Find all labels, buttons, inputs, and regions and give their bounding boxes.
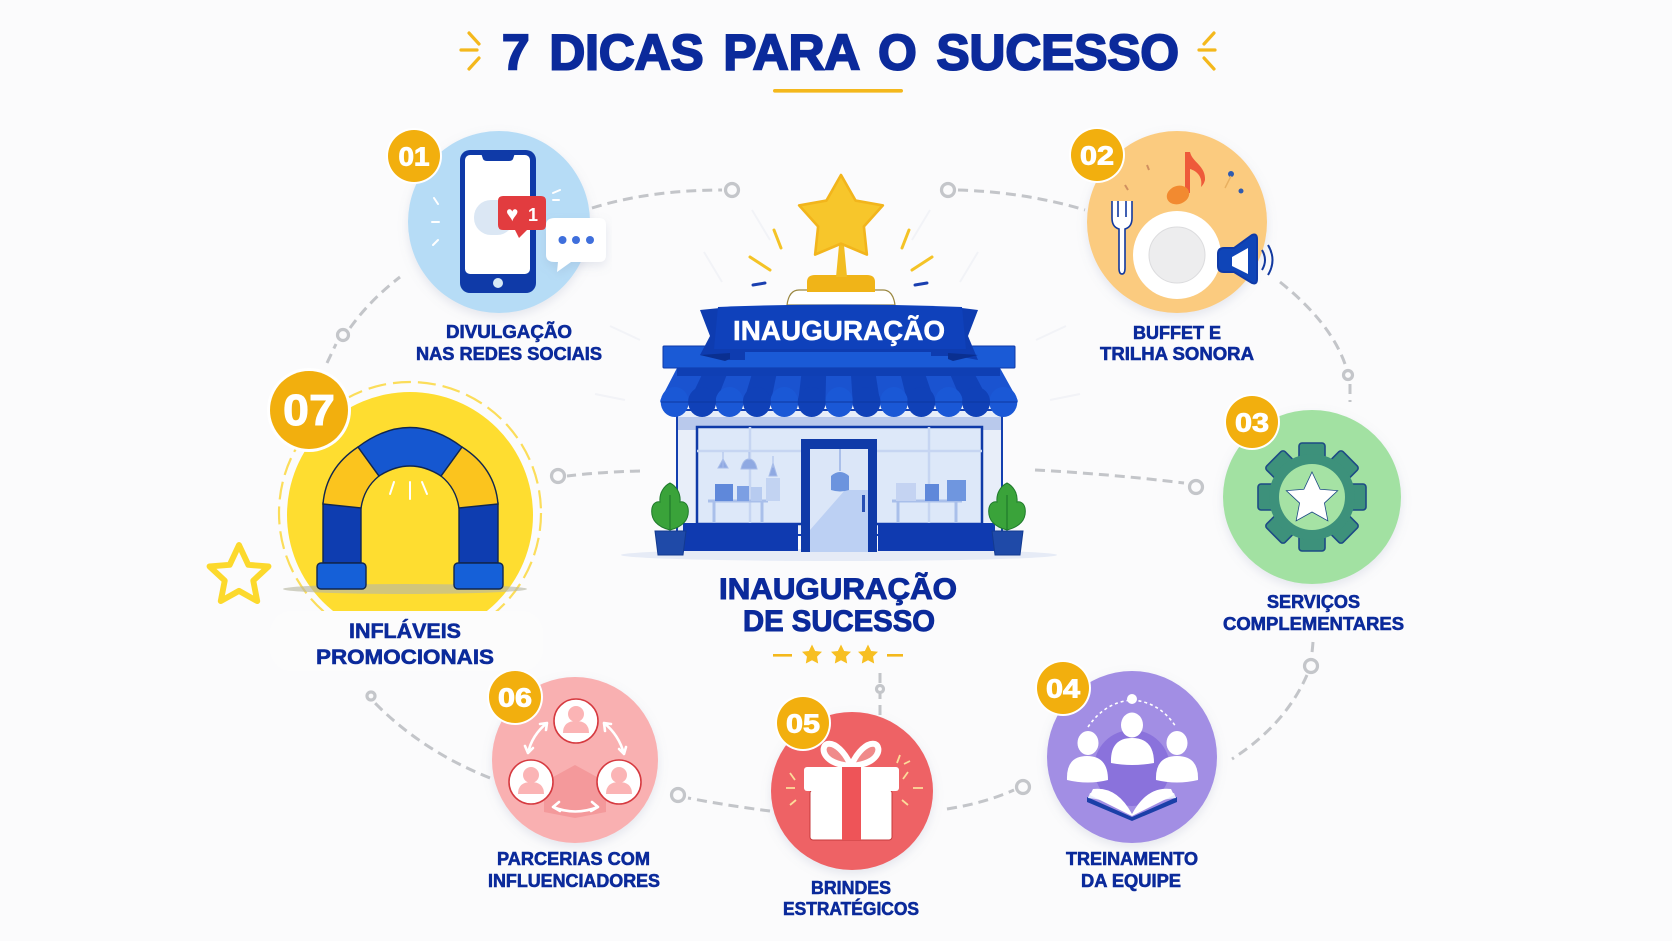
badge 02: 02 <box>1080 140 1114 170</box>
awning <box>660 368 1018 417</box>
label 05 <box>783 878 919 919</box>
label 06 <box>488 849 660 891</box>
icon: speaker <box>1218 234 1272 284</box>
storefront <box>621 304 1057 561</box>
badge 02 <box>1069 127 1125 183</box>
plant left <box>652 483 688 555</box>
step 07: inflatables <box>210 368 543 671</box>
central heading: DE SUCESSO <box>743 605 935 638</box>
banner <box>700 304 978 361</box>
label backdrop <box>270 611 543 671</box>
roof beam <box>663 346 1015 368</box>
connecting dashed path <box>327 184 1352 811</box>
label 05: BRINDES <box>811 878 891 898</box>
label 04: DA EQUIPE <box>1081 871 1181 891</box>
badge 04 <box>1035 660 1091 716</box>
label 01: NAS REDES SOCIAIS <box>416 344 602 364</box>
label 03 <box>1223 592 1404 634</box>
label 02: TRILHA SONORA <box>1100 344 1254 364</box>
icon: phone <box>460 150 536 293</box>
label 06: PARCERIAS COM <box>497 849 650 869</box>
label 03: COMPLEMENTARES <box>1223 614 1404 634</box>
icon: inflatable arch <box>317 428 503 589</box>
label 02: BUFFET E <box>1133 323 1221 343</box>
icon: music note <box>1164 152 1205 207</box>
step 01: social media <box>386 128 606 364</box>
icon: open book <box>1087 789 1177 821</box>
label 01 <box>416 321 602 364</box>
icon: chat bubble <box>546 218 606 272</box>
icon: gift box <box>804 744 899 840</box>
banner: INAUGURAÇÃO <box>733 315 945 346</box>
icon: like notification: ♥ <box>506 203 518 226</box>
step 05: gifts <box>771 695 933 919</box>
label 04: TREINAMENTO <box>1066 849 1198 869</box>
central heading <box>719 572 957 663</box>
label 07: PROMOCIONAIS <box>316 646 494 669</box>
icon: gear with star <box>1258 443 1366 551</box>
label 01: DIVULGAÇÃO <box>446 321 572 342</box>
central heading: INAUGURAÇÃO <box>719 572 957 606</box>
windows <box>697 427 982 524</box>
icon: like notification: 1 <box>528 205 538 225</box>
step 04: training <box>1035 660 1217 891</box>
ground shadow <box>621 549 1057 561</box>
label 07: INFLÁVEIS <box>349 620 461 643</box>
icon: team <box>1067 694 1198 782</box>
badge 04: 04 <box>1046 674 1081 704</box>
icon: like notification <box>498 196 546 238</box>
base <box>683 523 798 551</box>
badge 07 <box>267 368 351 452</box>
label 02 <box>1100 323 1254 364</box>
wall <box>677 410 1002 535</box>
door <box>801 439 877 552</box>
badge 05 <box>775 695 831 751</box>
label 07 <box>316 620 494 669</box>
badge 06 <box>487 669 543 725</box>
icon: plate <box>1133 211 1221 299</box>
icon: fork <box>1112 201 1132 274</box>
step 06: influencers <box>487 669 660 891</box>
badge 05: 05 <box>786 708 820 738</box>
icon: star outline <box>210 545 268 601</box>
badge 03: 03 <box>1235 408 1269 438</box>
badge 07: 07 <box>283 386 335 435</box>
badge 01: 01 <box>398 142 430 172</box>
step 02: buffet and music <box>1069 127 1272 364</box>
badge 03 <box>1224 394 1280 450</box>
plant right <box>989 483 1025 555</box>
step 03: services <box>1223 394 1404 634</box>
badge 06: 06 <box>498 682 532 712</box>
rating stars <box>773 644 903 663</box>
icon: influencer network <box>509 699 641 812</box>
label 04 <box>1066 849 1198 891</box>
title: 7 DICAS PARA O SUCESSO <box>502 24 1179 80</box>
label 05: ESTRATÉGICOS <box>783 898 919 919</box>
badge 01 <box>386 128 442 184</box>
label 06: INFLUENCIADORES <box>488 871 660 891</box>
label 03: SERVIÇOS <box>1267 592 1360 612</box>
central trophy <box>595 175 1080 400</box>
